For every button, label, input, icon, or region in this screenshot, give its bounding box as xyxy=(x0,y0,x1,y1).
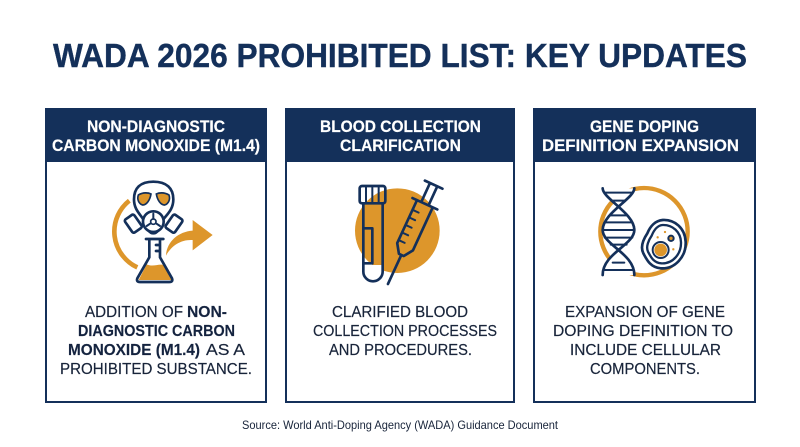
body text: carbon monoxide: MONOXIDE (M1.4) xyxy=(68,342,200,359)
body text: gene doping: DOPING DEFINITION TO xyxy=(553,323,733,340)
panel: non-diagnostic carbon monoxide xyxy=(45,108,267,402)
body text: carbon monoxide: PROHIBITED SUBSTANCE. xyxy=(60,361,252,378)
panel header: blood collection xyxy=(285,108,515,162)
body text: blood collection: AND PROCEDURES. xyxy=(329,342,472,359)
body text: gene doping: COMPONENTS. xyxy=(590,361,700,378)
source note: Source: World Anti-Doping Agency (WADA) Guidance Document xyxy=(242,418,559,432)
icon: test tube and syringe xyxy=(355,179,446,290)
body text: blood collection: CLARIFIED BLOOD xyxy=(332,304,468,321)
body text: carbon monoxide: NON- xyxy=(187,304,227,321)
panel header: gene doping xyxy=(533,108,756,162)
body text: blood collection: COLLECTION PROCESSES xyxy=(313,323,497,340)
icon: DNA helix and cell xyxy=(600,188,688,275)
body text: blood collection xyxy=(313,304,497,359)
body text: carbon monoxide: DIAGNOSTIC CARBON xyxy=(78,323,235,340)
body text: gene doping xyxy=(553,304,733,378)
panel header: carbon monoxide xyxy=(45,108,267,162)
panel header: carbon monoxide: NON-DIAGNOSTIC xyxy=(87,117,225,136)
panel: blood collection clarification xyxy=(285,108,515,402)
icon: gas mask and flask xyxy=(114,182,213,282)
body text: gene doping: EXPANSION OF GENE xyxy=(565,304,725,321)
body text: gene doping: INCLUDE CELLULAR xyxy=(570,342,721,359)
panel header: gene doping: GENE DOPING xyxy=(590,117,699,136)
panel: gene doping definition expansion xyxy=(533,108,756,402)
panel header: blood collection: CLARIFICATION xyxy=(340,136,461,155)
body text: carbon monoxide: ADDITION OF xyxy=(85,304,183,321)
title: WADA 2026 PROHIBITED LIST: KEY UPDATES xyxy=(53,37,747,74)
panel header: blood collection: BLOOD COLLECTION xyxy=(320,117,481,136)
panel header: gene doping: DEFINITION EXPANSION xyxy=(542,136,739,155)
body text: carbon monoxide: AS A xyxy=(206,342,245,359)
body text: carbon monoxide xyxy=(60,304,252,378)
panel header: carbon monoxide: CARBON MONOXIDE (M1.4) xyxy=(52,136,260,155)
